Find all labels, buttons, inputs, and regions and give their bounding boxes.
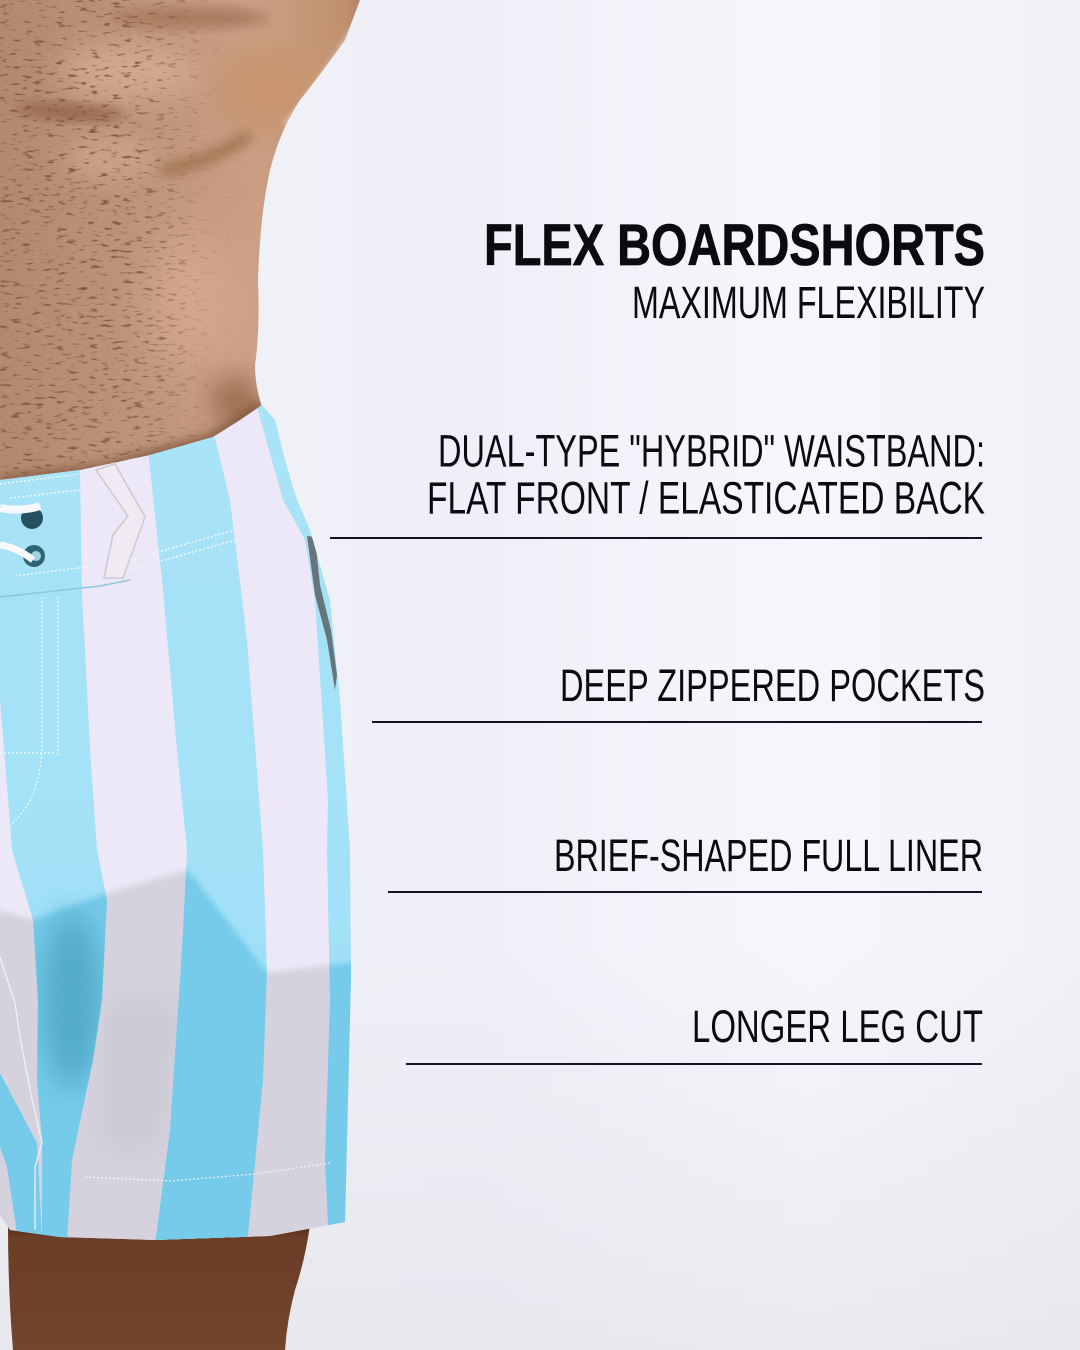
hem stitching bbox=[85, 1163, 330, 1181]
photo: striped boardshorts bbox=[0, 400, 370, 1260]
inseam bbox=[0, 957, 42, 1230]
shaded white panels bbox=[0, 870, 330, 1240]
body hair texture bbox=[0, 0, 214, 478]
waistband lower edge bbox=[0, 580, 130, 597]
zipper bbox=[307, 536, 337, 690]
front pocket stitching bbox=[0, 597, 58, 825]
feature: leg cut: LONGER LEG CUT bbox=[692, 1001, 983, 1052]
blue stripes bbox=[0, 400, 370, 1260]
waistband stitching bbox=[0, 474, 235, 576]
photo: model torso bbox=[0, 0, 360, 490]
feature: hybrid waistband bbox=[330, 426, 985, 539]
eyelets and drawcord bbox=[0, 506, 45, 567]
waistband fly patch bbox=[96, 464, 145, 578]
photo: model leg bbox=[8, 1225, 310, 1350]
side pocket panel bbox=[296, 498, 310, 530]
